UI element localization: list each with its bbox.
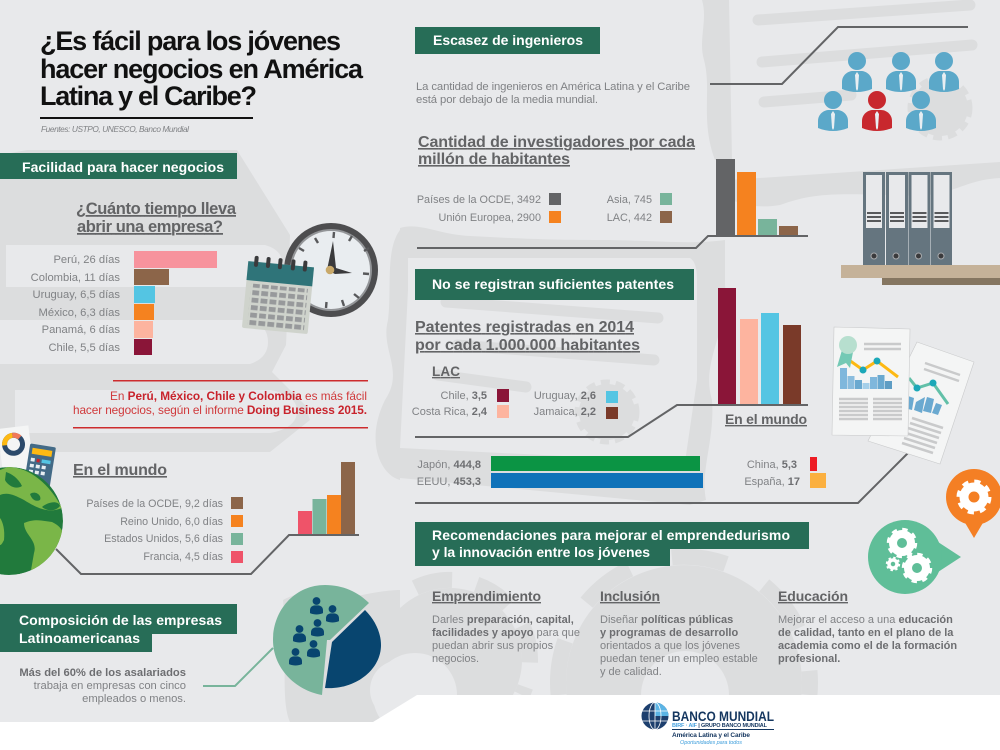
legend: investigadores: Asia, 745	[607, 194, 652, 206]
legend: investigadores: Países de la OCDE, 3492	[417, 194, 541, 206]
bar chart: days to open a company: Panamá, 6 días	[42, 324, 120, 336]
connector line: ingenieros	[710, 27, 968, 84]
legend: en el mundo: Países de la OCDE, 9,2 días	[86, 498, 223, 510]
heading: cuanto tiempo: abrir una empresa?	[77, 218, 223, 236]
banner: facilidad	[0, 153, 237, 179]
text: inclusion: y programas de desarrollo	[600, 627, 738, 639]
logo: Banco Mundial: Oportunidades para todos	[680, 740, 742, 746]
text: asalariados	[19, 667, 186, 705]
legend: LAC: Uruguay, 2,6	[534, 390, 596, 402]
icon: calendar	[242, 255, 315, 334]
heading: cuanto tiempo	[76, 200, 237, 236]
bar chart: days to open a company: Chile, 5,5 días	[48, 342, 120, 354]
text: emprendimiento: Darles preparación, capital,	[432, 614, 574, 626]
bar chart: days to open a company: Perú, 26 días	[53, 254, 120, 266]
background patent sheet details	[438, 302, 658, 442]
heading: patentes: por cada 1.000.000 habitantes	[415, 337, 640, 354]
bar chart: world patents: EEUU, 453,3	[417, 476, 481, 488]
heading: en el mundo: En el mundo	[73, 462, 167, 479]
bar chart: days to open a company: Colombia, 11 días	[31, 272, 120, 284]
title: Latina y el Caribe?	[40, 81, 257, 111]
heading: investigadores: Cantidad de investigadores por cada	[418, 134, 695, 151]
banner: facilidad: Facilidad para hacer negocios	[22, 159, 224, 175]
text: asalariados: trabaja en empresas con cinco	[34, 680, 186, 692]
banner: patentes	[415, 269, 694, 300]
text: educacion: Mejorar el acceso a una educación	[778, 614, 953, 626]
connector line	[203, 648, 273, 686]
text: educacion: Educación	[778, 588, 848, 604]
bar chart: days to open a company	[31, 251, 217, 355]
banner: composicion: Composición de las empresas	[19, 612, 222, 628]
bar chart: world patents: China, 5,3	[747, 459, 797, 471]
callout: Doing Business	[73, 380, 368, 428]
icon: globe	[0, 467, 63, 576]
text: emprendimiento: negocios.	[432, 653, 479, 665]
heading: cuanto tiempo: ¿Cuánto tiempo lleva	[76, 200, 237, 218]
legend: LAC: Chile, 3,5	[441, 390, 487, 402]
text: educacion	[778, 588, 957, 665]
callout: Doing Business: En Perú, México, Chile y Colombia es más fácil	[110, 389, 367, 403]
background lighter inner areas	[0, 245, 729, 739]
legend: LAC	[412, 389, 618, 419]
text: inclusion	[600, 588, 758, 678]
icon: clock	[284, 223, 378, 317]
text: inclusion: puedan tener un empleo estable	[600, 653, 758, 665]
text: inclusion: y de calidad.	[600, 666, 662, 678]
text: inclusion: Inclusión	[600, 588, 660, 604]
text: educacion: de calidad, tanto en el plano de la	[778, 627, 954, 639]
legend: en el mundo: Francia, 4,5 días	[143, 551, 223, 563]
bar chart: days to open a company: México, 6,3 días	[39, 307, 120, 319]
text: educacion: academia como el de la formación	[778, 640, 957, 652]
legend: en el mundo	[86, 497, 243, 563]
sources: Fuentes: USTPO, UNESCO, Banco Mundial	[41, 124, 190, 134]
icon: reports	[832, 327, 974, 464]
bar chart: days to open a company: Uruguay, 6,5 días	[33, 289, 120, 301]
title	[40, 26, 364, 119]
bar chart: world patents	[417, 456, 826, 488]
text: inclusion: orientados a que los jóvenes	[600, 640, 741, 652]
heading: patentes	[415, 319, 640, 354]
icon: report paper and calculator	[0, 425, 56, 489]
banner: patentes: No se registran suficientes patentes	[432, 276, 674, 292]
banner: composicion: Latinoamericanas	[19, 630, 140, 646]
banner: recomendaciones: y la innovación entre los jóvenes	[432, 544, 650, 560]
heading: patentes: Patentes registradas en 2014	[415, 319, 634, 336]
legend: en el mundo: Estados Unidos, 5,6 días	[104, 533, 223, 545]
text: emprendimiento: Emprendimiento	[432, 588, 541, 604]
banner: escasez	[415, 27, 600, 54]
icon: orange gear pin	[946, 469, 1000, 538]
text: inclusion: Diseñar políticas públicas	[600, 614, 733, 626]
heading: LAC: LAC	[432, 364, 460, 379]
icon: engineers group	[818, 52, 959, 131]
text: ingenieros: está por debajo de la media mundial.	[416, 94, 598, 106]
legend: LAC: Jamaica, 2,2	[534, 406, 596, 418]
legend: en el mundo: Reino Unido, 6,0 días	[120, 516, 223, 528]
bar chart: investigadores	[417, 159, 808, 248]
title: ¿Es fácil para los jóvenes	[40, 26, 341, 56]
callout: Doing Business: hacer negocios, según el informe Doing Business 2015.	[73, 403, 367, 417]
text: emprendimiento	[432, 588, 580, 665]
banner: recomendaciones: Recomendaciones para mejorar el emprendedurismo	[432, 527, 790, 543]
logo: Banco Mundial	[642, 702, 774, 746]
heading: en el mundo patents: En el mundo	[725, 411, 807, 427]
legend: LAC: Costa Rica, 2,4	[412, 406, 488, 418]
text: ingenieros: La cantidad de ingenieros en América Latina y el Caribe	[416, 81, 690, 93]
legend: investigadores: LAC, 442	[607, 212, 652, 224]
banner: recomendaciones	[415, 522, 809, 566]
banner: composicion	[0, 604, 237, 652]
pie chart: company composition	[273, 585, 381, 695]
title: hacer negocios en América	[40, 54, 364, 84]
text: ingenieros	[416, 81, 690, 106]
footer	[0, 695, 1000, 750]
heading: investigadores	[418, 134, 695, 168]
icon: binders on shelf	[841, 172, 1000, 285]
legend: investigadores	[417, 193, 672, 224]
banner: escasez: Escasez de ingenieros	[433, 32, 583, 48]
heading: investigadores: millón de habitantes	[418, 151, 570, 168]
text: emprendimiento: puedan abrir sus propios	[432, 640, 554, 652]
text: asalariados: Más del 60% de los asalariados	[19, 667, 186, 679]
logo: Banco Mundial: BIRF · AIF | GRUPO BANCO MUNDIAL	[672, 723, 768, 729]
text: asalariados: empleados o menos.	[82, 693, 186, 705]
bar chart: world patents: España, 17	[744, 476, 800, 488]
icon: green gears pin	[868, 520, 961, 594]
text: emprendimiento: facilidades y apoyo para que	[432, 627, 580, 639]
text: educacion: profesional.	[778, 653, 840, 665]
bar chart: LAC patents	[415, 288, 808, 437]
logo: Banco Mundial: BANCO MUNDIAL	[672, 708, 774, 724]
bar chart: world patents: Japón, 444,8	[417, 459, 481, 471]
legend: investigadores: Unión Europea, 2900	[438, 212, 541, 224]
connector line: world patents	[415, 453, 908, 503]
bar chart: en el mundo	[56, 462, 359, 574]
logo: Banco Mundial: América Latina y el Caribe	[672, 732, 750, 739]
